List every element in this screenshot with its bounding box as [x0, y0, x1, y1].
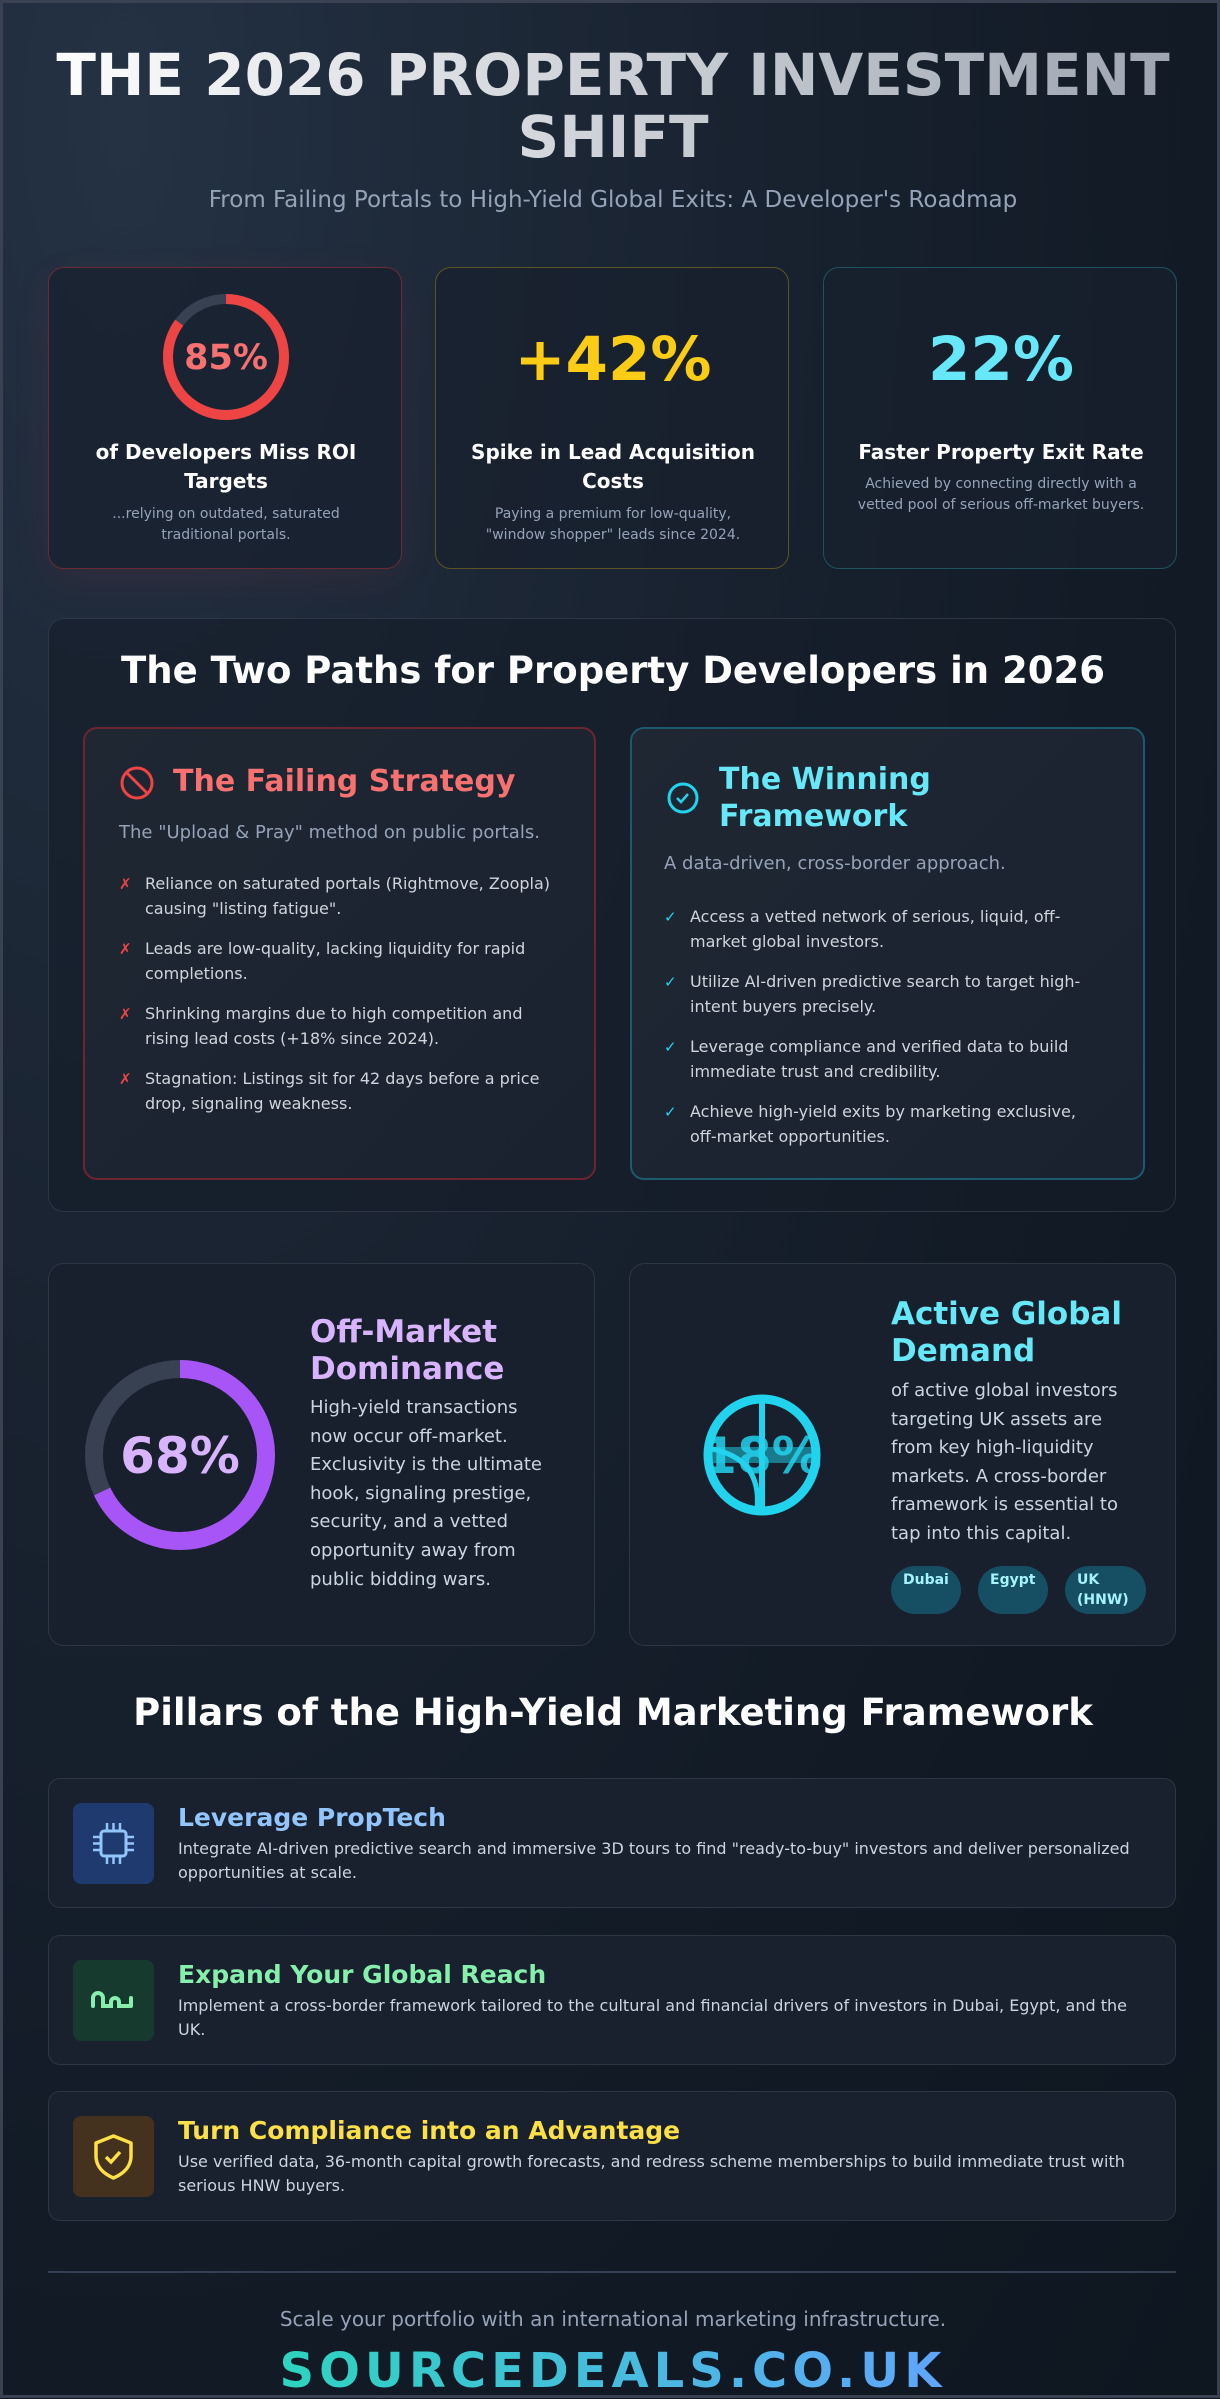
pills: markets: Egypt [990, 1572, 1035, 1588]
bullet list: Leverage compliance and verified data to build immediate trust and credibility. [690, 1037, 1068, 1081]
body text: High-yield transactions now occur off-market. Exclusivity is the ultimate hook, signaling prestige, security, and a vetted opportunity away from public bidding wars. [310, 1397, 542, 1590]
bullet list: ✓ [664, 1103, 677, 1121]
footer tagline: Scale your portfolio with an international marketing infrastructure. [280, 2307, 946, 2331]
description: Implement a cross-border framework tailored to the cultural and financial drivers of investors in Dubai, Egypt, and the UK. [178, 1996, 1127, 2039]
ring chart 68% [85, 1360, 275, 1550]
pillar: compliance [48, 2091, 1176, 2221]
panel: off-market dominance [48, 1263, 595, 1646]
icon: ban [120, 766, 154, 800]
bullet list: Stagnation: Listings sit for 42 days before a price drop, signaling weakness. [145, 1069, 539, 1113]
description: ...relying on outdated, saturated traditional portals. [112, 506, 340, 543]
heading: pillars: Pillars of the High-Yield Marketing Framework [133, 1691, 1093, 1734]
heading [891, 1296, 1122, 1369]
ring chart 85% [163, 294, 289, 420]
panel: active global demand [629, 1263, 1176, 1646]
bullet list: Utilize AI-driven predictive search to target high-intent buyers precisely. [690, 972, 1080, 1016]
pills: markets: Dubai [903, 1572, 949, 1588]
title: THE 2026 PROPERTY INVESTMENT SHIFT [56, 41, 1170, 171]
heading: Demand [891, 1333, 1035, 1369]
description: Paying a premium for low-quality, "window shopper" leads since 2024. [486, 506, 740, 543]
bullet list: Reliance on saturated portals (Rightmove, Zoopla) causing "listing fatigue". [145, 874, 550, 918]
stat card: +42% [435, 267, 789, 569]
ring chart 85%: 85% [184, 338, 268, 378]
heading [719, 762, 931, 834]
description: Achieved by connecting directly with a vetted pool of serious off-market buyers. [858, 476, 1144, 513]
pillar: global reach [48, 1935, 1176, 2065]
title: Turn Compliance into an Advantage [178, 2116, 680, 2145]
bullet list: ✓ [664, 1038, 677, 1056]
stat card: 85% [48, 267, 402, 569]
icon: globe with 18% [702, 1394, 822, 1516]
subtitle: From Failing Portals to High-Yield Global Exits: A Developer's Roadmap [209, 187, 1017, 213]
bullet list: ✗ [119, 1005, 132, 1023]
bullet list: ✗ [119, 940, 132, 958]
label: Spike in Lead Acquisition Costs [471, 440, 755, 493]
big number: +42% [514, 324, 712, 395]
title: Expand Your Global Reach [178, 1960, 546, 1989]
bullet list: ✗ [119, 875, 132, 893]
bullet list: Access a vetted network of serious, liquid, off-market global investors. [690, 907, 1060, 951]
pillar: proptech [48, 1778, 1176, 1908]
bullet list [664, 907, 1080, 1146]
panel: two paths [48, 618, 1176, 1212]
subheading: A data-driven, cross-border approach. [664, 853, 1006, 874]
panel: failing strategy [83, 727, 596, 1180]
heading: The Two Paths for Property Developers in 2026 [121, 649, 1105, 692]
heading: Off-Market [310, 1314, 497, 1350]
ring chart 68%: 68% [120, 1427, 240, 1485]
heading: Framework [719, 799, 907, 834]
label: of Developers Miss ROI Targets [96, 440, 356, 493]
bullet list: ✓ [664, 973, 677, 991]
heading: The Winning [719, 762, 931, 797]
bullet list: ✓ [664, 908, 677, 926]
icon: global [73, 1960, 154, 2041]
icon: check circle [668, 782, 698, 814]
description: Use verified data, 36-month capital growth forecasts, and redress scheme memberships to build immediate trust with serious HNW buyers. [178, 2152, 1125, 2195]
big number: 22% [928, 324, 1074, 395]
label: Faster Property Exit Rate [858, 440, 1144, 464]
icon: shield [73, 2116, 154, 2197]
bullet list: Shrinking margins due to high competition and rising lead costs (+18% since 2024). [145, 1004, 522, 1048]
icon: globe with 18%: 18% [702, 1427, 822, 1485]
heading: The Failing Strategy [173, 764, 515, 799]
footer brand: SOURCEDEALS.CO.UK [280, 2343, 946, 2399]
heading: Active Global [891, 1296, 1122, 1332]
heading [310, 1314, 504, 1387]
subheading: The "Upload & Pray" method on public portals. [119, 822, 540, 843]
icon: chip [73, 1803, 154, 1884]
title: Leverage PropTech [178, 1803, 446, 1832]
heading: Dominance [310, 1351, 504, 1387]
pills: markets [891, 1566, 1146, 1614]
pills: markets: UK (HNW) [1077, 1572, 1129, 1608]
bullet list: ✗ [119, 1070, 132, 1088]
bullet list: Achieve high-yield exits by marketing exclusive, off-market opportunities. [690, 1102, 1076, 1146]
panel: winning framework [630, 727, 1145, 1180]
bullet list: Leads are low-quality, lacking liquidity for rapid completions. [145, 939, 525, 983]
bullet list [119, 874, 550, 1113]
stat card: 22% [823, 267, 1177, 569]
description: Integrate AI-driven predictive search and immersive 3D tours to find "ready-to-buy" investors and deliver personalized opportunities at scale. [178, 1839, 1130, 1882]
body text: of active global investors targeting UK assets are from key high-liquidity markets. A cross-border framework is essential to tap into this capital. [891, 1380, 1118, 1544]
